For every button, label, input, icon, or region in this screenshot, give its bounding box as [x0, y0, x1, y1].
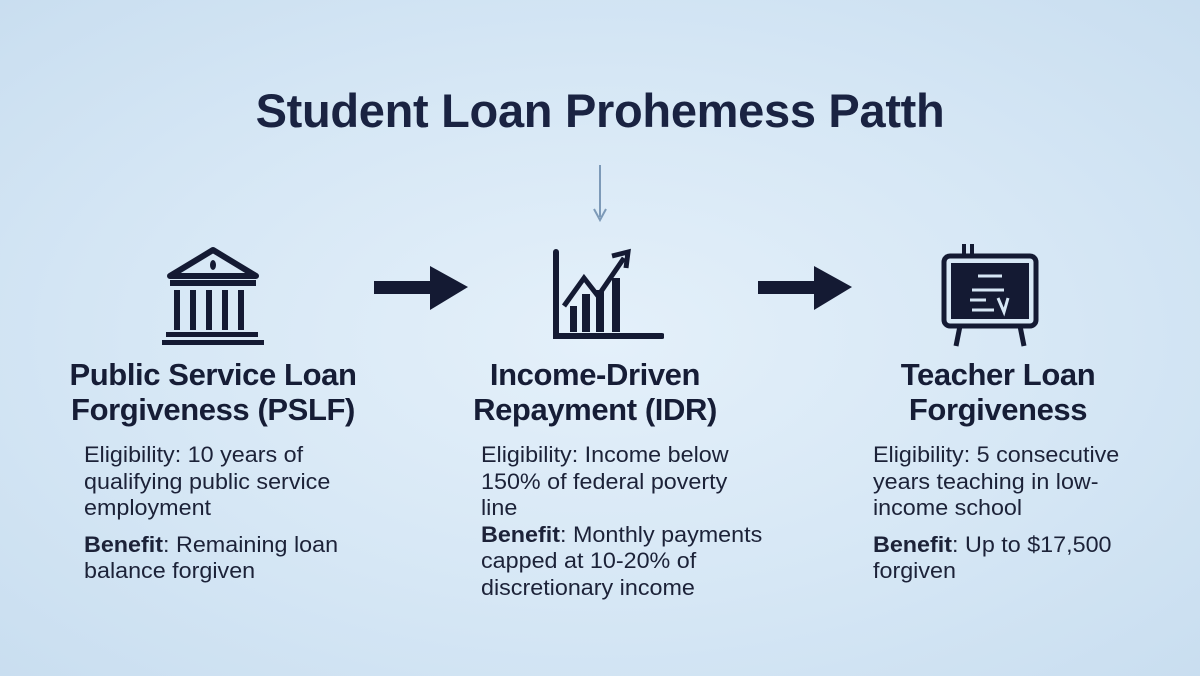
arrow: down [593, 165, 607, 222]
text: PSLF details: Benefit: Remaining loan [84, 532, 338, 556]
heading: PSLF [69, 357, 356, 427]
text: PSLF details [84, 442, 338, 583]
heading: Teacher: Teacher Loan [901, 357, 1095, 392]
text: Teacher details: years teaching in low- [873, 468, 1099, 494]
text: IDR details: 150% of federal poverty [481, 468, 727, 494]
text: PSLF details: qualifying public service [84, 468, 330, 494]
heading: IDR [473, 357, 717, 427]
text: IDR details [481, 442, 762, 600]
title: Student Loan Prohemess Patth [256, 84, 944, 137]
heading: IDR: Repayment (IDR) [473, 392, 717, 427]
heading: Teacher: Forgiveness [909, 392, 1087, 427]
heading: IDR: Income-Driven [490, 357, 700, 392]
text: Teacher details [873, 442, 1119, 583]
text: IDR details: Eligibility: Income below [481, 442, 729, 467]
text: IDR details: discretionary income [481, 574, 695, 600]
text: IDR details: capped at 10-20% of [481, 548, 696, 573]
icon: easel board [942, 244, 1038, 346]
text: Teacher details: forgiven [873, 558, 956, 583]
arrow: right 2 [758, 266, 852, 310]
text: IDR details: line [481, 495, 517, 520]
text: PSLF details: balance forgiven [84, 558, 255, 583]
text: Teacher details: income school [873, 495, 1022, 520]
icon: bank [162, 247, 264, 345]
text: PSLF details: Eligibility: 10 years of [84, 442, 303, 467]
text: Teacher details: Eligibility: 5 consecutive [873, 442, 1119, 467]
arrow: right 1 [374, 266, 468, 310]
heading: Teacher [901, 357, 1095, 427]
text: PSLF details: employment [84, 495, 211, 520]
heading: PSLF: Forgiveness (PSLF) [71, 392, 355, 427]
icon: chart [553, 248, 664, 339]
heading: PSLF: Public Service Loan [69, 357, 356, 392]
text: Teacher details: Benefit: Up to $17,500 [873, 532, 1112, 556]
text: IDR details: Benefit: Monthly payments [481, 522, 762, 546]
